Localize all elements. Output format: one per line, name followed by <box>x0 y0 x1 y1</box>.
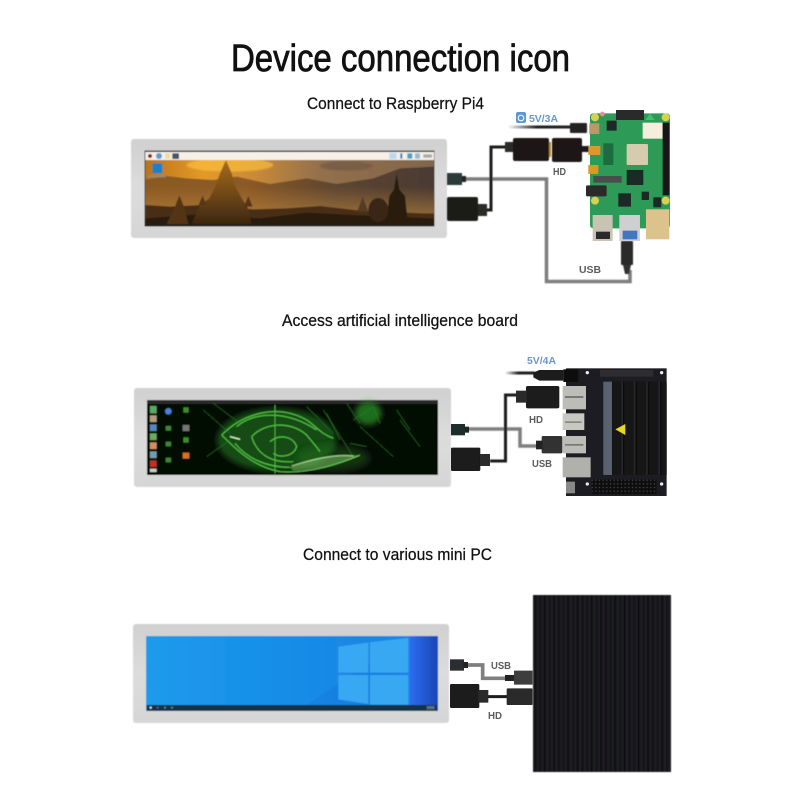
label: HD: HD <box>553 167 566 178</box>
green swirl <box>203 402 420 473</box>
plug: USB <box>542 436 562 453</box>
panel: Raspberry Pi connection <box>131 110 670 282</box>
heading: mini PC: Connect to various mini PC <box>303 545 492 564</box>
mini PC enclosure <box>533 595 671 772</box>
taskbar <box>147 705 437 711</box>
cables <box>465 126 630 282</box>
label: 5V/3A: 5V/3A <box>529 113 558 125</box>
label: HD: HD <box>488 711 502 722</box>
heading: AI board: Access artificial intelligence board <box>282 311 518 330</box>
label: USB: USB <box>491 661 511 672</box>
heading: Raspberry Pi4: Connect to Raspberry Pi4 <box>307 94 484 113</box>
icon: power <box>516 112 526 123</box>
monitor: blue desktop <box>133 624 449 723</box>
label: USB: USB <box>532 459 552 470</box>
plug: HDMI <box>526 386 559 408</box>
board: Raspberry Pi 4 <box>586 110 670 241</box>
board: AI developer kit <box>451 368 667 496</box>
right pagoda <box>386 173 408 224</box>
label: HD: HD <box>529 415 543 426</box>
title: Device connection icon <box>231 38 570 80</box>
cables <box>468 372 538 461</box>
plugs at monitor <box>451 424 465 435</box>
connectors <box>447 123 633 274</box>
windows logo <box>338 638 408 705</box>
monitor: sunset desktop <box>131 139 447 238</box>
panel: AI board connection <box>134 355 667 496</box>
desktop icons <box>150 406 189 472</box>
label: USB: USB <box>579 264 601 276</box>
monitor: green desktop <box>134 388 451 487</box>
big pagoda <box>192 160 252 224</box>
cables and plugs <box>450 659 533 708</box>
panel: mini PC connection <box>133 595 671 772</box>
label: 5V/4A: 5V/4A <box>527 355 556 367</box>
top bar <box>145 152 434 160</box>
